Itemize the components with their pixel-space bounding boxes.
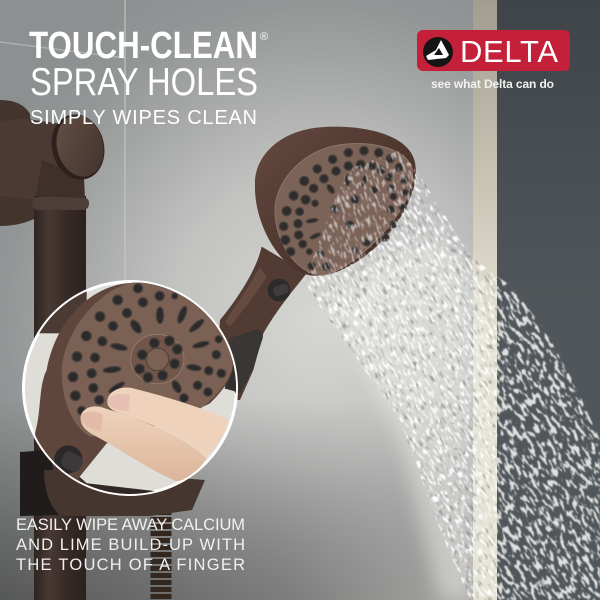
inset background handle	[220, 331, 236, 394]
side button	[268, 279, 290, 301]
heading: TOUCH-CLEAN: TOUCH-CLEAN	[29, 25, 258, 67]
title	[29, 25, 268, 129]
face	[275, 144, 413, 275]
inset head body	[35, 282, 233, 479]
upper finger	[107, 387, 228, 457]
dark wall panel	[497, 0, 600, 600]
inset center cluster	[131, 334, 184, 384]
inset spray holes	[68, 284, 226, 415]
rail collar	[32, 197, 89, 210]
end knob	[45, 109, 111, 185]
water droplets over wall	[302, 171, 497, 600]
inset lower rail and bracket	[44, 450, 155, 494]
inset rail	[39, 291, 87, 334]
rubber grip	[229, 329, 263, 393]
wall flange	[0, 100, 36, 226]
background: shower wall tile	[0, 0, 474, 600]
Delta logo	[417, 30, 570, 91]
wall mount and rail	[0, 100, 111, 600]
lower finger	[81, 406, 207, 481]
inset side button	[54, 445, 85, 474]
head body	[255, 127, 416, 276]
spray holes	[279, 146, 408, 270]
hose	[150, 510, 172, 600]
inset circle: finger wiping spray face	[22, 280, 238, 496]
caption: AND LIME BUILD-UP WITH	[16, 536, 245, 554]
beige wall trim strip	[473, 0, 497, 600]
water droplets over head face	[308, 150, 416, 275]
water droplets over dark panel	[497, 276, 600, 600]
tagline: see what Delta can do	[431, 77, 554, 91]
shower holder bracket	[20, 450, 205, 516]
water spray haze	[330, 230, 474, 600]
logo wordmark: DELTA	[460, 34, 558, 69]
caption: EASILY WIPE AWAY CALCIUM	[16, 516, 245, 534]
subheading: SIMPLY WIPES CLEAN	[30, 107, 257, 129]
handle	[215, 247, 307, 400]
main hand shower	[215, 127, 416, 400]
heading: SPRAY HOLES: SPRAY HOLES	[30, 61, 258, 104]
registered mark: ®	[260, 31, 268, 43]
inset face	[62, 283, 233, 437]
fingernails	[108, 394, 130, 411]
logo icon	[423, 37, 453, 67]
caption	[16, 516, 245, 574]
logo badge	[417, 30, 570, 71]
horizontal arm	[0, 118, 62, 200]
vertical rail	[34, 196, 86, 600]
caption: THE TOUCH OF A FINGER	[16, 556, 245, 574]
